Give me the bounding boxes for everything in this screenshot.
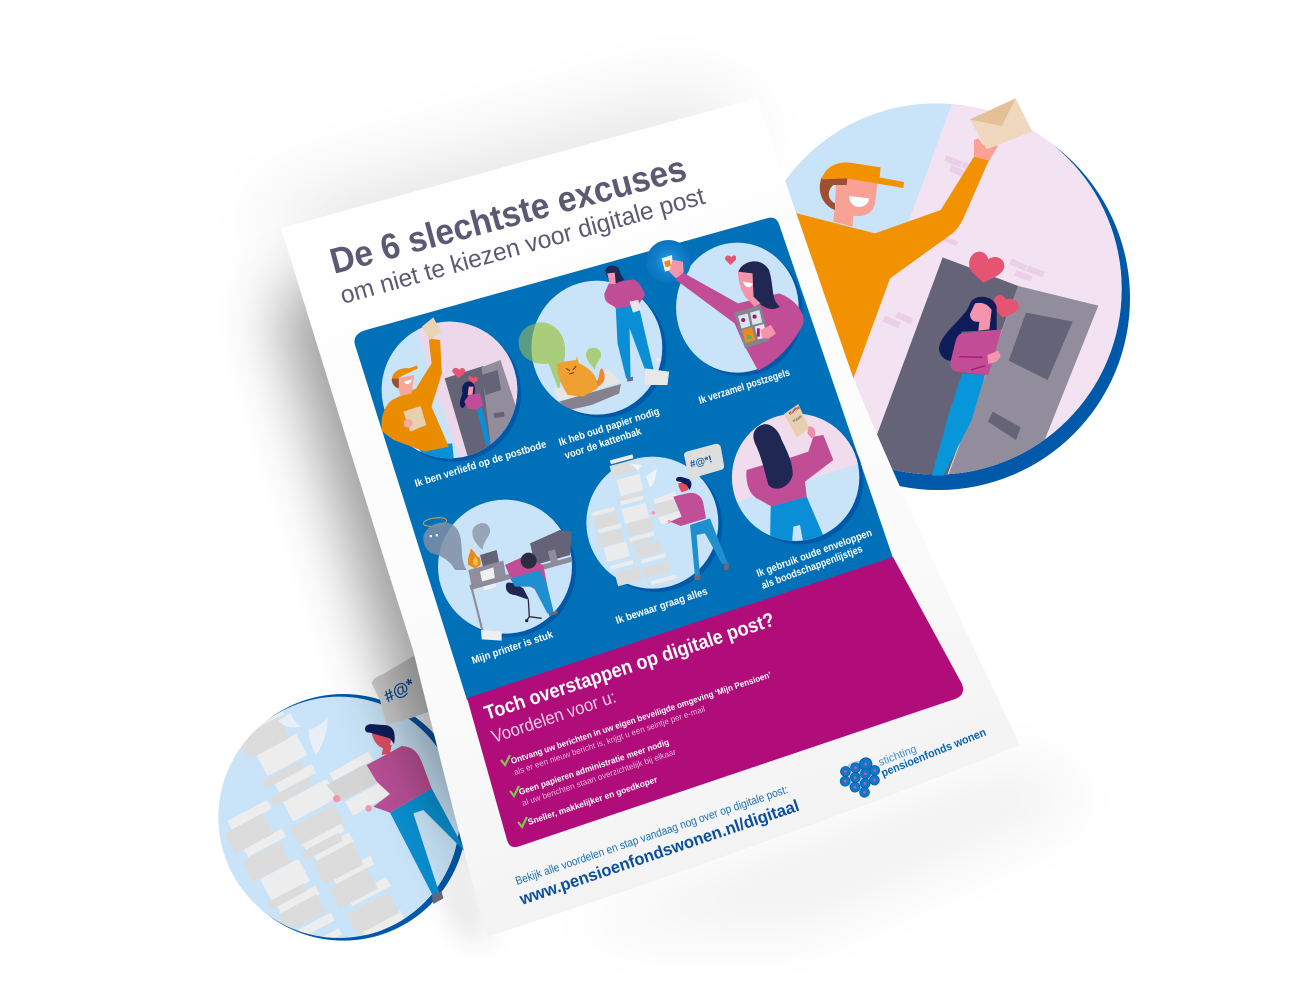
poster title: De 6 slechtste excuses	[325, 147, 691, 282]
benefit 2: Geen papieren administratie meer nodig	[517, 737, 670, 797]
magenta heading: Toch overstappen op digitale post?	[482, 609, 777, 725]
excuse 5: paper stacks	[586, 444, 729, 592]
caption: postbode: Ik ben verliefd op de postbode	[413, 438, 548, 490]
logo: pensioenfonds wonen	[880, 727, 988, 780]
excuse 6: broken printer	[423, 500, 576, 641]
excuse 4: shopping list: Kaas	[792, 414, 803, 423]
excuse 4: shopping list	[730, 404, 863, 547]
caption: enveloppen: Ik gebruik oude enveloppen	[755, 527, 874, 580]
subheading: Voordelen voor u:	[489, 687, 619, 747]
excuse 4: shopping list: Koffie	[788, 404, 801, 416]
benefit 1: Ontvang uw berichten in uw eigen beveiligde omgeving ‘Mijn Pensioen’	[509, 669, 772, 766]
large circle: postman illustration	[785, 98, 1130, 490]
speech bubble	[372, 650, 443, 725]
speech bubble: #@*!	[689, 454, 714, 471]
speech bubble: #@*	[381, 674, 418, 706]
postman	[790, 98, 1032, 390]
logo	[835, 727, 988, 804]
poster subtitle: om niet te kiezen voor digitale post	[337, 182, 708, 310]
caption: kattenbak: Ik heb oud papier nodig	[557, 406, 661, 449]
website url: www.pensioenfondswonen.nl/digitaal	[516, 796, 802, 909]
logo text: stichting	[877, 743, 918, 769]
paper stacks	[225, 705, 405, 945]
excuse 1: postman	[382, 317, 528, 463]
caption: bewaar: Ik bewaar graag alles	[614, 585, 709, 627]
benefit 3: Sneller, makkelijker en goedkoper	[526, 774, 659, 827]
caption: enveloppen: als boodschappenlijstjes	[760, 543, 864, 592]
poster sheet	[281, 98, 1020, 937]
speech bubble	[684, 444, 724, 482]
excuse 3: stamp collector	[646, 240, 804, 376]
small circle: man with paper stacks	[218, 650, 467, 945]
benefit 1: als er een nieuw bericht is, krijgt u een seintje per e-mail	[512, 704, 706, 777]
infographic scene	[218, 86, 1130, 941]
caption: printer: Mijn printer is stuk	[470, 629, 555, 667]
caption: kattenbak: voor de kattenbak	[563, 425, 643, 462]
logo mark	[835, 754, 887, 804]
icon: hearts	[969, 252, 1019, 317]
woman at the door	[932, 297, 1002, 476]
caption: kattenbak	[557, 406, 661, 462]
excuse 2: cat litter	[519, 265, 669, 418]
blue panel	[354, 218, 893, 700]
man carrying papers	[327, 724, 467, 904]
call to action: Bekijk alle voordelen en stap vandaag nog over op digitale post:	[514, 784, 790, 888]
magenta panel	[467, 557, 963, 847]
caption: postzegels: Ik verzamel postzegels	[697, 367, 792, 407]
poster shadow	[250, 90, 1090, 945]
benefit 2: al uw berichten staan overzichtelijk bij elkaar	[520, 746, 677, 808]
